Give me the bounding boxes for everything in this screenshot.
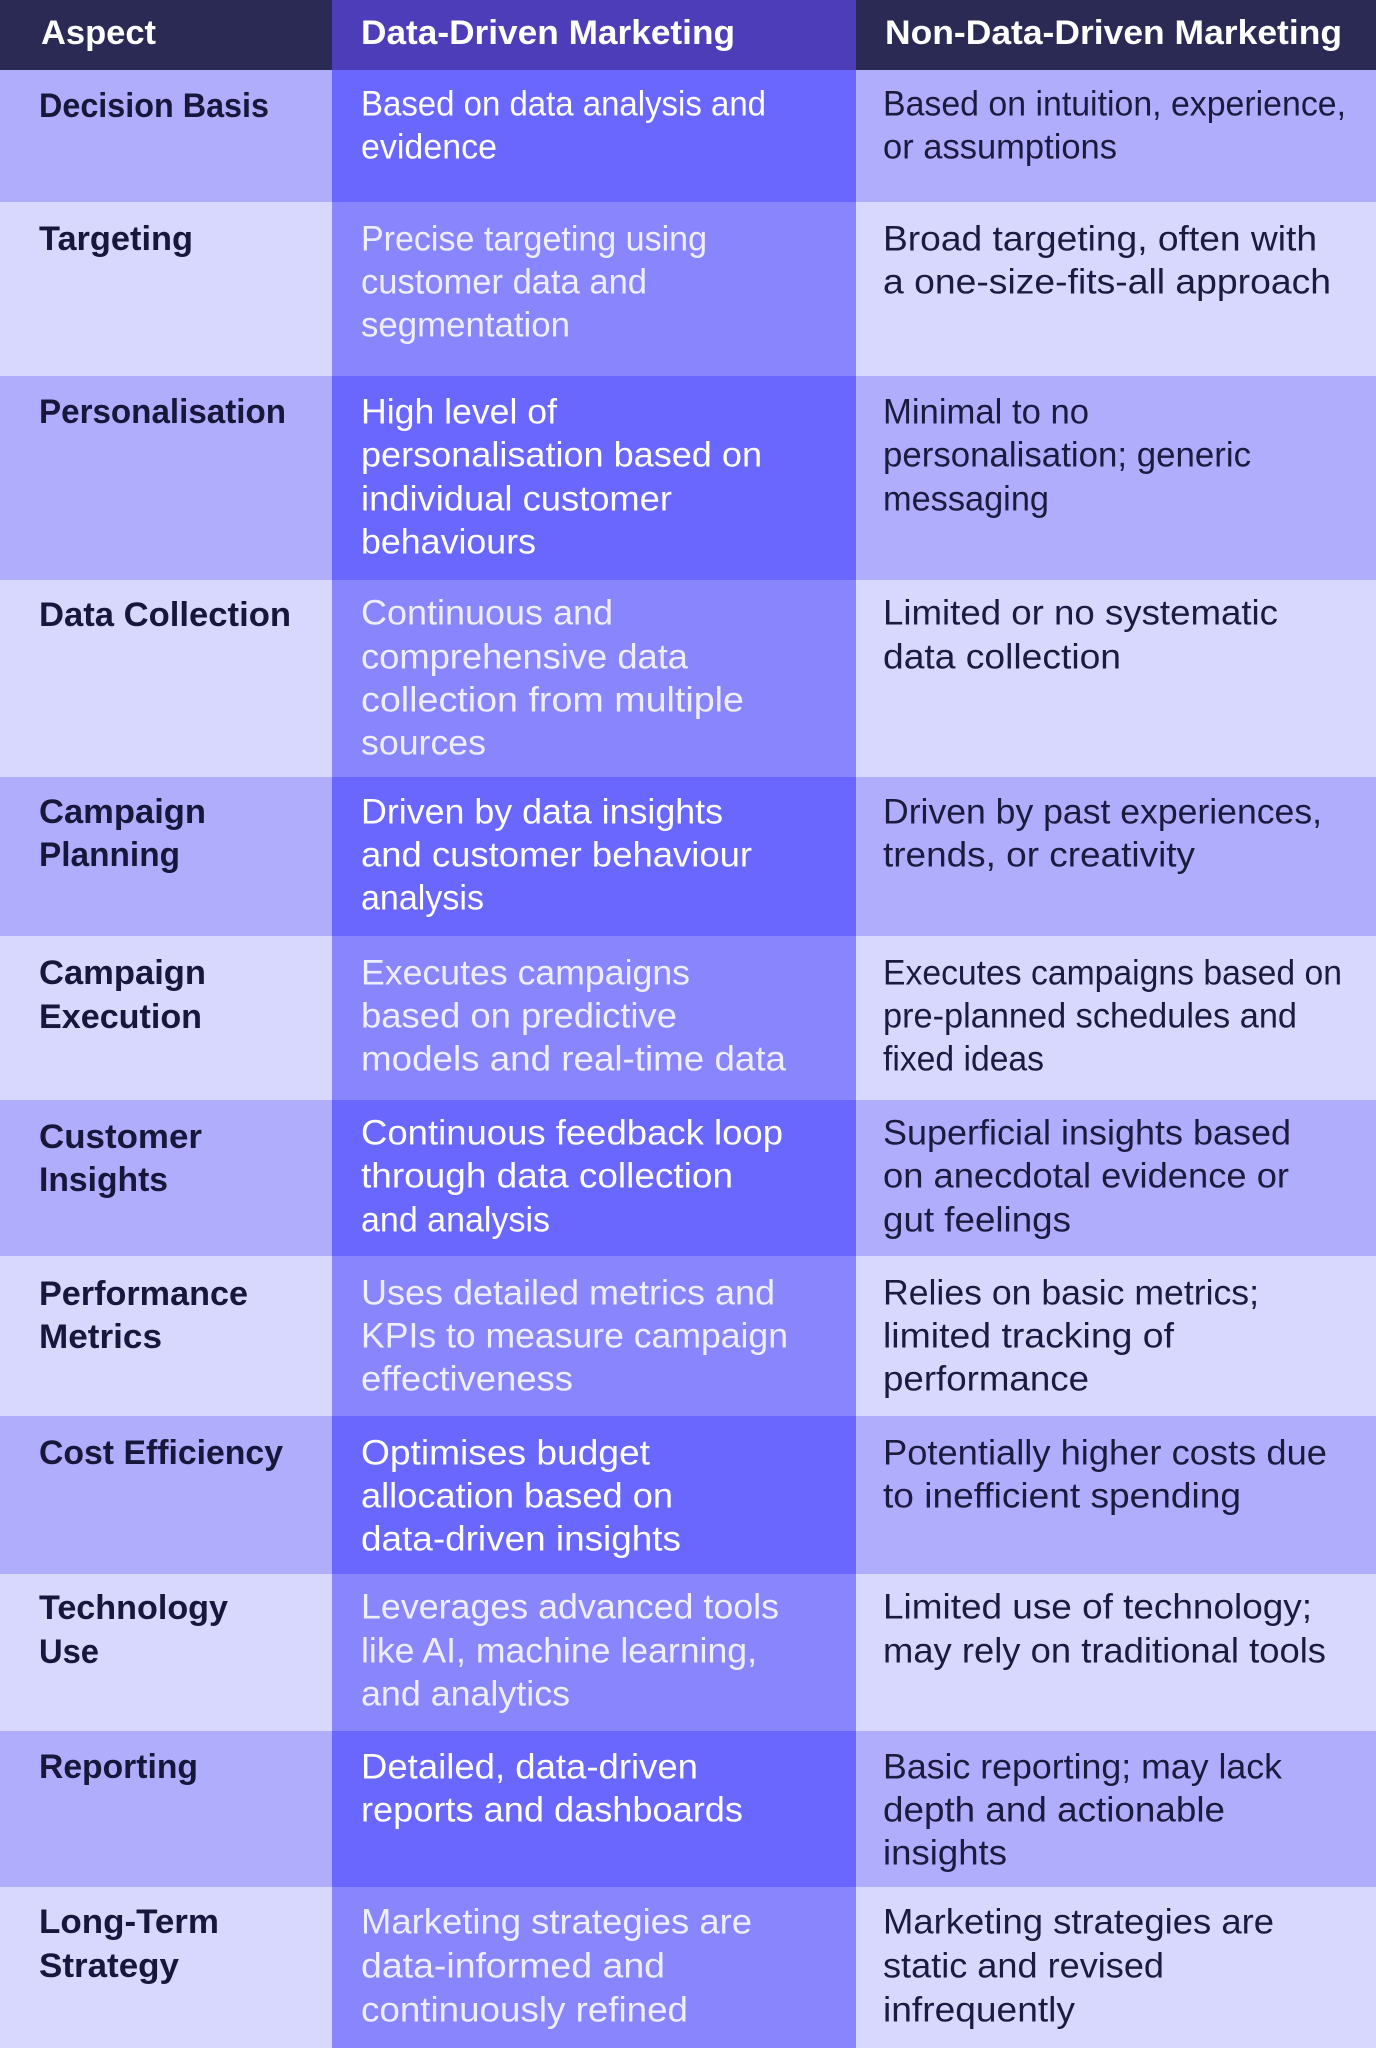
row: Targeting xyxy=(0,202,1376,376)
row: Cost Efficiency: Potentially higher costs due xyxy=(883,1434,1327,1473)
row: Technology Use: Technology xyxy=(39,1589,228,1627)
row: Targeting: segmentation xyxy=(361,306,570,345)
row: Decision Basis: or assumptions xyxy=(883,128,1117,167)
row: Cost Efficiency: data-driven insights xyxy=(361,1520,681,1559)
row: Long-Term Strategy: infrequently xyxy=(883,1991,1076,2030)
row: Data Collection: Limited or no systematic xyxy=(883,594,1278,633)
row: Customer Insights: on anecdotal evidence or xyxy=(883,1157,1289,1196)
row: Technology Use: may rely on traditional tools xyxy=(883,1632,1326,1671)
row: Long-Term Strategy: Marketing strategies are xyxy=(361,1903,752,1942)
row: Technology Use: Leverages advanced tools xyxy=(361,1588,779,1627)
row: Campaign Execution: based on predictive xyxy=(361,997,677,1036)
row: Customer Insights: Superficial insights based xyxy=(883,1114,1291,1153)
row: Targeting: a one-size-fits-all approach xyxy=(883,263,1331,302)
row: Targeting: Broad targeting, often with xyxy=(883,220,1317,259)
row: Campaign Execution: Executes campaigns xyxy=(361,954,690,993)
row: Campaign Planning: Planning xyxy=(39,836,180,874)
row: Long-Term Strategy: data-informed and xyxy=(361,1947,665,1986)
row: Campaign Execution: models and real-time data xyxy=(361,1040,787,1079)
header row: Aspect xyxy=(41,14,156,52)
row: Personalisation: messaging xyxy=(883,480,1049,519)
row: Cost Efficiency: Cost Efficiency xyxy=(39,1434,283,1472)
row: Campaign Planning: trends, or creativity xyxy=(883,836,1196,875)
row: Data Collection: Data Collection xyxy=(39,596,291,634)
row: Long-Term Strategy: Marketing strategies are xyxy=(883,1903,1274,1942)
row: Long-Term Strategy: static and revised xyxy=(883,1947,1164,1986)
row: Decision Basis xyxy=(0,70,1376,202)
row: Campaign Planning: Driven by past experiences, xyxy=(883,793,1322,832)
row: Campaign Planning: Driven by data insights xyxy=(361,793,723,832)
header row xyxy=(0,0,1376,70)
row: Campaign Planning xyxy=(0,777,1376,936)
row: Personalisation: personalisation based on xyxy=(361,436,762,475)
row: Performance Metrics xyxy=(0,1256,1376,1416)
header row: Non-Data-Driven Marketing xyxy=(885,14,1342,52)
row: Long-Term Strategy xyxy=(0,1887,1376,2048)
row: Reporting xyxy=(0,1731,1376,1887)
row: Cost Efficiency xyxy=(0,1416,1376,1574)
row: Personalisation: High level of xyxy=(361,393,557,432)
row: Data Collection: sources xyxy=(361,724,486,763)
row: Data Collection: collection from multiple xyxy=(361,681,744,720)
row: Performance Metrics: effectiveness xyxy=(361,1360,573,1399)
row: Technology Use xyxy=(0,1574,1376,1731)
row: Technology Use: Limited use of technology; xyxy=(883,1588,1312,1627)
row: Customer Insights: gut feelings xyxy=(883,1201,1071,1240)
row: Data Collection: Continuous and xyxy=(361,594,613,633)
row: Personalisation xyxy=(0,376,1376,580)
row: Campaign Execution: Campaign xyxy=(39,954,206,992)
row: Customer Insights xyxy=(0,1100,1376,1256)
row: Technology Use: Use xyxy=(39,1633,99,1671)
row: Reporting: Reporting xyxy=(39,1748,198,1786)
row: Cost Efficiency: to inefficient spending xyxy=(883,1477,1241,1516)
row: Targeting: customer data and xyxy=(361,263,647,302)
row: Data Collection: data collection xyxy=(883,638,1121,677)
row: Campaign Execution xyxy=(0,936,1376,1100)
row: Campaign Execution: fixed ideas xyxy=(883,1040,1044,1079)
row: Personalisation: individual customer xyxy=(361,480,672,519)
row: Customer Insights: Customer xyxy=(39,1118,202,1156)
row: Customer Insights: Continuous feedback loop xyxy=(361,1114,783,1153)
row: Decision Basis: Based on data analysis and xyxy=(361,85,766,124)
row: Performance Metrics: Uses detailed metrics and xyxy=(361,1274,775,1313)
row: Targeting: Targeting xyxy=(39,220,193,258)
row: Reporting: insights xyxy=(883,1834,1007,1873)
row: Technology Use: and analytics xyxy=(361,1675,570,1714)
row: Personalisation: Minimal to no xyxy=(883,393,1089,432)
row: Data Collection xyxy=(0,580,1376,777)
row: Personalisation: Personalisation xyxy=(39,393,286,431)
row: Decision Basis: evidence xyxy=(361,128,497,167)
row: Customer Insights: Insights xyxy=(39,1161,168,1199)
row: Long-Term Strategy: continuously refined xyxy=(361,1991,688,2030)
row: Campaign Execution: Executes campaigns based on xyxy=(883,954,1342,993)
row: Targeting: Precise targeting using xyxy=(361,220,707,259)
row: Personalisation: behaviours xyxy=(361,523,536,562)
row: Decision Basis: Based on intuition, experience, xyxy=(883,85,1346,124)
row: Customer Insights: through data collection xyxy=(361,1157,733,1196)
row: Performance Metrics: limited tracking of xyxy=(883,1317,1174,1356)
row: Technology Use: like AI, machine learning, xyxy=(361,1632,757,1671)
row: Long-Term Strategy: Strategy xyxy=(39,1947,179,1985)
row: Decision Basis: Decision Basis xyxy=(39,87,269,125)
row: Long-Term Strategy: Long-Term xyxy=(39,1903,219,1941)
row: Performance Metrics: Performance xyxy=(39,1275,248,1313)
row: Campaign Planning: Campaign xyxy=(39,793,206,831)
row: Cost Efficiency: Optimises budget xyxy=(361,1434,650,1473)
row: Personalisation: personalisation; generic xyxy=(883,436,1251,475)
row: Campaign Planning: analysis xyxy=(361,879,484,918)
row: Performance Metrics: performance xyxy=(883,1360,1089,1399)
row: Campaign Planning: and customer behaviour xyxy=(361,836,752,875)
row: Reporting: reports and dashboards xyxy=(361,1791,743,1830)
row: Cost Efficiency: allocation based on xyxy=(361,1477,673,1516)
row: Reporting: depth and actionable xyxy=(883,1791,1225,1830)
row: Campaign Execution: Execution xyxy=(39,998,202,1036)
row: Customer Insights: and analysis xyxy=(361,1201,550,1240)
row: Performance Metrics: Metrics xyxy=(39,1318,162,1356)
row: Reporting: Basic reporting; may lack xyxy=(883,1748,1283,1787)
row: Data Collection: comprehensive data xyxy=(361,638,689,677)
row: Performance Metrics: Relies on basic metrics; xyxy=(883,1274,1259,1313)
header row: Data-Driven Marketing xyxy=(361,14,735,52)
row: Campaign Execution: pre-planned schedules and xyxy=(883,997,1297,1036)
row: Performance Metrics: KPIs to measure campaign xyxy=(361,1317,788,1356)
row: Reporting: Detailed, data-driven xyxy=(361,1748,698,1787)
